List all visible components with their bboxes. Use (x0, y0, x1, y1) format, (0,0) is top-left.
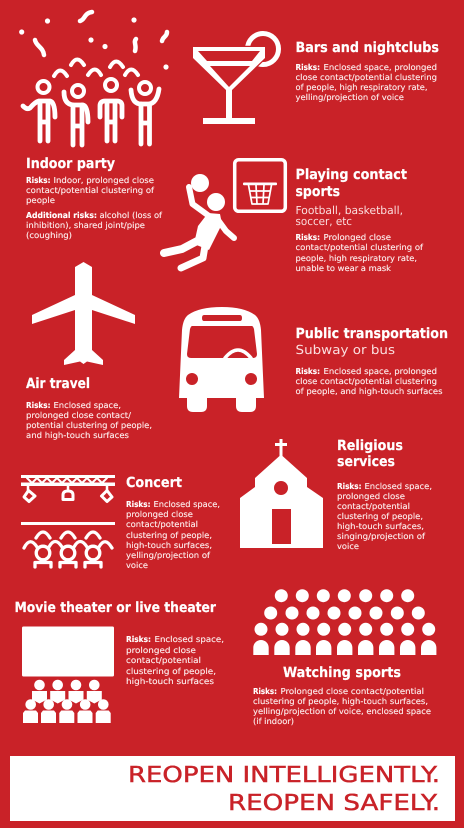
text: concert risks: yelling/projection of (126, 550, 211, 560)
text: transportation risks: of people, and high-touch surfaces (296, 386, 442, 396)
text: concert risks: clustering of people, (126, 530, 212, 540)
icon: airplane (32, 262, 135, 365)
text: transportation risks: close contact/potential clustering (296, 376, 437, 386)
text: indoor party risks: people (26, 195, 55, 205)
text: theater risks: contact/potential (126, 655, 201, 665)
text: watching sports risks: (if indoor) (253, 716, 294, 726)
text: watching sports risks: Prolonged close contact/potential (280, 686, 424, 696)
panel: bars and nightclubs (193, 34, 439, 124)
heading: religious services (337, 438, 403, 470)
text: concert risks: Risks: (126, 499, 150, 509)
text: indoor party risks: contact/potential clustering of (26, 185, 155, 195)
icon: theater screen and audience (22, 626, 114, 723)
text: concert risks: high-touch surfaces, (126, 540, 212, 550)
text: indoor party risks: Indoor, prolonged close (54, 175, 154, 185)
icon: basketball player (164, 174, 234, 268)
text: bars risks: Risks: (296, 62, 320, 72)
panel: playing contact sports (164, 160, 424, 273)
heading: air travel: Air travel (26, 376, 90, 392)
text: air travel risks: and high-touch surfaces (26, 430, 129, 440)
text: transportation risks (296, 366, 442, 396)
heading: playing contact sports (296, 167, 407, 200)
text: sports risks: Prolonged close (324, 232, 391, 242)
slogan text (128, 763, 440, 816)
icon: cocktail glass (193, 34, 278, 124)
icon: basketball hoop (235, 160, 285, 211)
text: religious risks: Enclosed space, (364, 481, 432, 491)
text: air travel risks: Enclosed space, (54, 400, 121, 410)
text: bars risks: yelling/projection of voice (296, 92, 404, 102)
text: indoor party risks: inhibition), shared joint/pipe (26, 220, 145, 230)
panel: concert (21, 475, 220, 570)
heading: public transportation: Public transportation (296, 326, 448, 342)
panel: movie theater (14, 600, 224, 723)
text: bars risks: Enclosed space, prolonged (324, 62, 437, 72)
subheading: sports list: soccer, etc (296, 215, 352, 228)
text: theater risks: prolonged close (126, 645, 196, 655)
text: air travel risks: prolonged close contact/ (26, 410, 131, 420)
icon: bus (179, 307, 264, 412)
text: religious risks: high-touch surfaces, (337, 521, 424, 531)
heading: playing contact sports: sports (296, 184, 340, 200)
text: bars risks (296, 62, 437, 102)
text: religious risks: clustering of people, (337, 511, 423, 521)
text: religious risks: singing/projection of (337, 531, 426, 541)
text: concert risks: Enclosed space, (154, 499, 220, 509)
text: transportation risks: Risks: (296, 366, 320, 376)
heading: indoor party: Indoor party (26, 156, 115, 172)
heading: playing contact sports: Playing contact (296, 167, 407, 183)
text: religious risks (337, 481, 432, 551)
heading: concert: Concert (126, 475, 182, 491)
text: religious risks: Risks: (337, 481, 362, 491)
banner: reopen slogan (10, 756, 455, 821)
text: sports risks: people, high respiratory rate, (296, 253, 417, 263)
heading: movie theater: Movie theater or live theater (14, 600, 216, 616)
heading: bars and nightclubs: Bars and nightclubs (296, 40, 439, 56)
panel: watching sports (253, 589, 436, 726)
text: air travel risks: Risks: (26, 400, 50, 410)
text: religious risks: voice (337, 541, 359, 551)
text: indoor party risks: Additional risks: (26, 210, 97, 220)
text: sports risks: Risks: (296, 232, 320, 242)
text: transportation risks: Enclosed space, prolonged (324, 366, 437, 376)
icon: church (240, 439, 323, 548)
text: watching sports risks: clustering of people, high-touch surfaces, (253, 696, 428, 706)
heading: religious services: Religious (337, 438, 403, 454)
text: indoor party risks (26, 175, 163, 240)
icon: party crowd with confetti (19, 12, 169, 145)
text: air travel risks: potential clustering of people, (26, 420, 152, 430)
text: religious risks: contact/potential (337, 501, 410, 511)
panel: indoor party (19, 12, 169, 240)
panel: public transportation (179, 307, 448, 412)
subheading: sports list: Football, basketball, (296, 204, 403, 217)
text: sports risks: contact/potential clustering of (296, 242, 424, 252)
text: concert risks: prolonged close (126, 509, 193, 519)
text: concert risks: voice (126, 560, 148, 570)
text: theater risks (126, 634, 224, 686)
icon: stadium crowd (253, 589, 436, 655)
text: air travel risks (26, 400, 152, 440)
panel: religious services (240, 438, 432, 551)
text: religious risks: prolonged close (337, 491, 405, 501)
text: concert risks (126, 499, 220, 570)
subheading: sports list (296, 204, 403, 228)
text: sports risks (296, 232, 424, 273)
heading: watching sports: Watching sports (283, 665, 401, 681)
text: theater risks: high-touch surfaces (126, 676, 214, 686)
slogan text: REOPEN INTELLIGENTLY. (128, 763, 440, 788)
text: theater risks: clustering of people, (126, 666, 216, 676)
text: concert risks: contact/potential (126, 519, 198, 529)
text: indoor party risks: (coughing) (26, 230, 72, 240)
panel: air travel (26, 262, 152, 440)
subheading: subway or bus: Subway or bus (296, 342, 395, 357)
icon: stage lights and crowd (21, 475, 115, 567)
text: bars risks: close contact/potential clustering (296, 72, 437, 82)
heading: religious services: services (337, 454, 395, 470)
text: indoor party risks: alcohol (loss of (100, 210, 163, 220)
text: watching sports risks (253, 686, 431, 726)
text: bars risks: of people, high respiratory rate, (296, 82, 428, 92)
text: indoor party risks: Risks: (26, 175, 50, 185)
slogan text: REOPEN SAFELY. (228, 791, 440, 816)
text: sports risks: unable to wear a mask (296, 263, 391, 273)
text: watching sports risks: Risks: (253, 686, 277, 696)
text: theater risks: Risks: (126, 634, 151, 644)
text: watching sports risks: yelling/projection of voice, enclosed space (253, 706, 431, 716)
text: theater risks: Enclosed space, (154, 634, 224, 644)
